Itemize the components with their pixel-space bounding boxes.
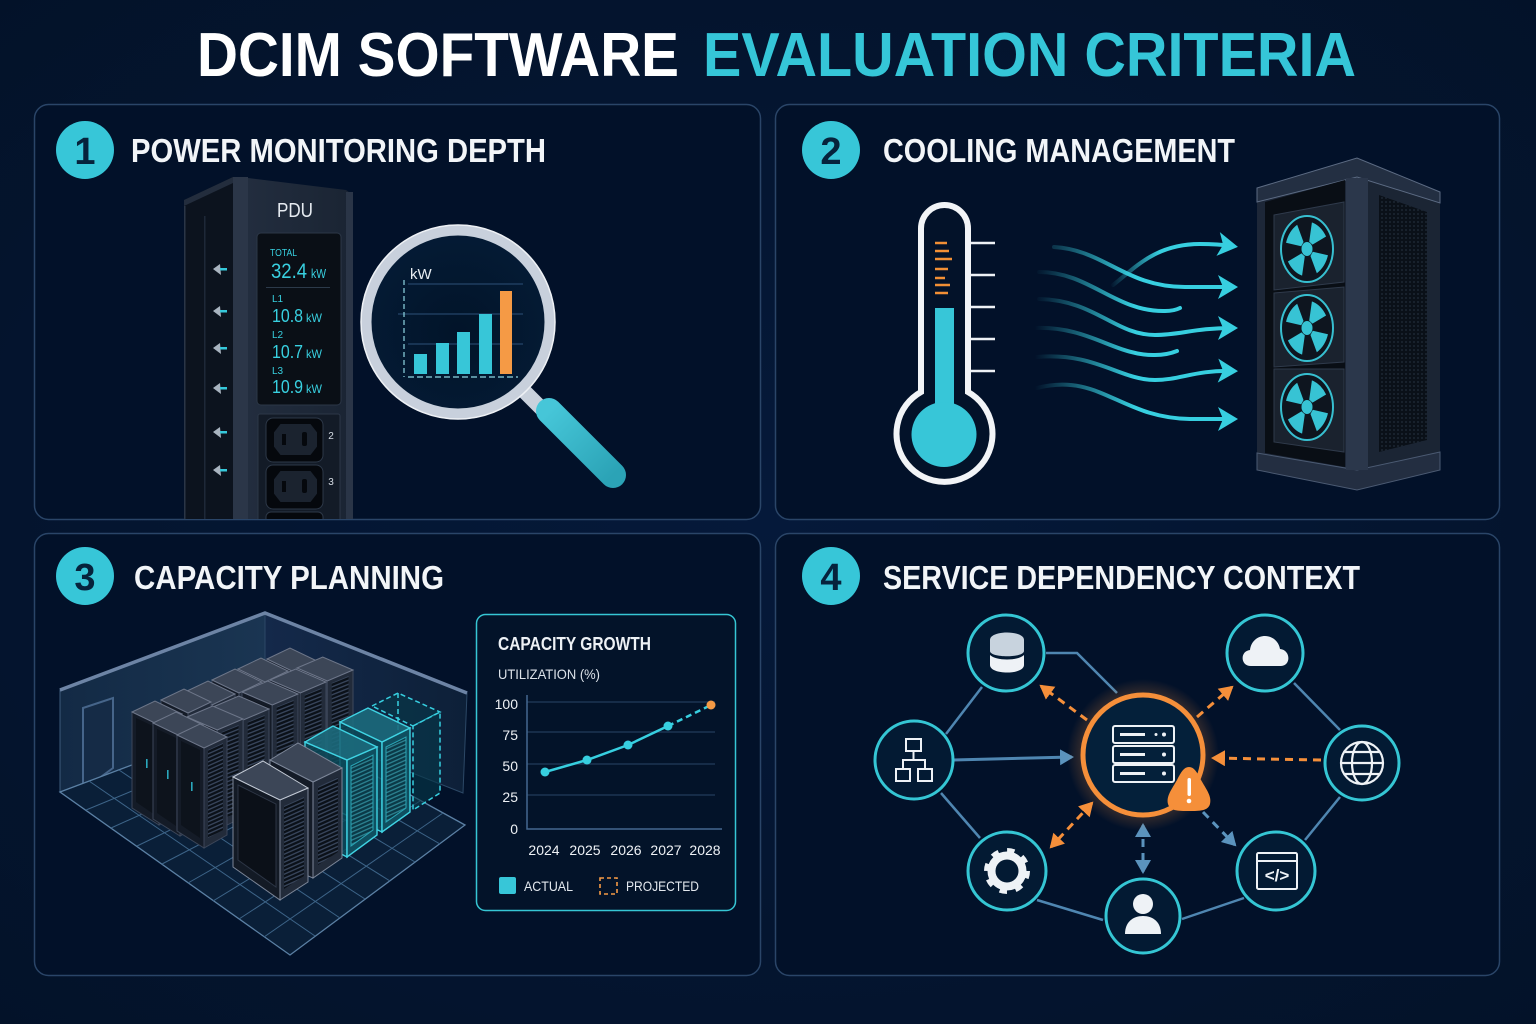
panel: power monitoring depth <box>34 104 760 527</box>
chart legend: PROJECTED <box>626 878 699 894</box>
PDU display screen: 10.7 <box>272 342 303 362</box>
panel: capacity planning <box>34 534 760 976</box>
PDU display screen: kW <box>306 382 323 396</box>
existing server rows <box>132 648 353 848</box>
node: database <box>968 615 1044 691</box>
panel 1 frame <box>34 104 760 520</box>
badge 4: 4 <box>820 557 842 599</box>
heading 1: POWER MONITORING DEPTH <box>131 132 546 169</box>
panel 3 frame <box>34 534 760 976</box>
badge 2: 2 <box>820 131 842 173</box>
thermometer <box>897 205 995 482</box>
PDU display screen: L2 <box>272 330 284 341</box>
projected rack outline <box>372 693 440 810</box>
alert badge <box>1168 767 1210 811</box>
PDU display screen: 32.4 <box>271 260 307 283</box>
PDU label: PDU <box>277 200 313 222</box>
line chart <box>495 695 722 858</box>
chart legend: ACTUAL <box>524 878 573 894</box>
badge 1: 1 <box>74 131 96 173</box>
node: globe <box>1325 726 1399 800</box>
node: user <box>1106 879 1180 953</box>
title <box>197 21 1356 90</box>
magnifying glass <box>361 225 613 475</box>
line chart: 2024 <box>528 842 560 858</box>
PDU outlets: 3 <box>328 477 334 488</box>
chart axis title: UTILIZATION (%) <box>498 666 600 682</box>
PDU side indicator LEDs <box>213 264 227 476</box>
heading 4: SERVICE DEPENDENCY CONTEXT <box>883 559 1360 596</box>
line chart: 2027 <box>650 842 682 858</box>
badge 3: 3 <box>74 557 96 599</box>
badge 1 <box>56 121 114 179</box>
line chart: 25 <box>502 789 518 805</box>
line chart: 100 <box>495 696 518 712</box>
line chart: 2025 <box>569 842 601 858</box>
line chart: 2028 <box>689 842 721 858</box>
line chart: 0 <box>510 821 518 837</box>
PDU outlets: 2 <box>328 431 334 442</box>
PDU display screen: L3 <box>272 366 284 377</box>
central server node <box>1067 679 1219 831</box>
heading 2: COOLING MANAGEMENT <box>883 132 1235 169</box>
PDU display screen: 10.9 <box>272 377 303 397</box>
PDU display screen: kW <box>306 311 323 325</box>
line chart: 75 <box>502 727 518 743</box>
chart legend <box>499 877 699 894</box>
isometric data hall <box>60 613 467 955</box>
dependency network links <box>941 653 1340 920</box>
panel 2 frame <box>776 104 1500 520</box>
PDU unit <box>184 177 353 527</box>
chart title: CAPACITY GROWTH <box>498 634 651 654</box>
cooling rack with fans <box>1257 158 1440 490</box>
magnifier lens <box>366 230 550 414</box>
planned cyan racks <box>305 708 410 857</box>
room floor grid <box>60 715 465 955</box>
line chart: 2026 <box>610 842 642 858</box>
badge 3 <box>56 547 114 605</box>
badge 4 <box>802 547 860 605</box>
node: network hierarchy <box>875 721 953 799</box>
capacity growth chart card <box>476 614 736 910</box>
node: gear <box>968 832 1046 910</box>
PDU display screen: L1 <box>272 294 284 305</box>
PDU display screen <box>257 233 341 405</box>
panel 4 frame <box>776 534 1500 976</box>
room walls <box>60 613 467 793</box>
PDU outlets <box>258 414 340 526</box>
PDU display screen: kW <box>311 266 327 281</box>
PDU display screen: kW <box>306 347 323 361</box>
bar chart in lens: kW <box>410 266 432 283</box>
server stack icon <box>1113 726 1174 782</box>
node: code window <box>1237 832 1315 910</box>
PDU display screen: 10.8 <box>272 306 303 326</box>
magnifier handle <box>524 391 613 475</box>
title: EVALUATION CRITERIA <box>703 21 1356 90</box>
bar chart in lens <box>398 266 523 377</box>
foreground racks <box>233 743 342 900</box>
node: cloud <box>1227 615 1303 691</box>
line chart: 50 <box>502 758 518 774</box>
badge 2 <box>802 121 860 179</box>
node: code window: </> <box>1265 866 1289 885</box>
panel: cooling management <box>776 104 1500 520</box>
PDU display screen: TOTAL <box>270 248 297 259</box>
dashed dependency arrows <box>1041 686 1321 872</box>
title: DCIM SOFTWARE <box>197 21 679 90</box>
airflow arrows <box>1035 244 1232 419</box>
panel: service dependency context <box>776 534 1500 976</box>
heading 3: CAPACITY PLANNING <box>134 559 444 596</box>
